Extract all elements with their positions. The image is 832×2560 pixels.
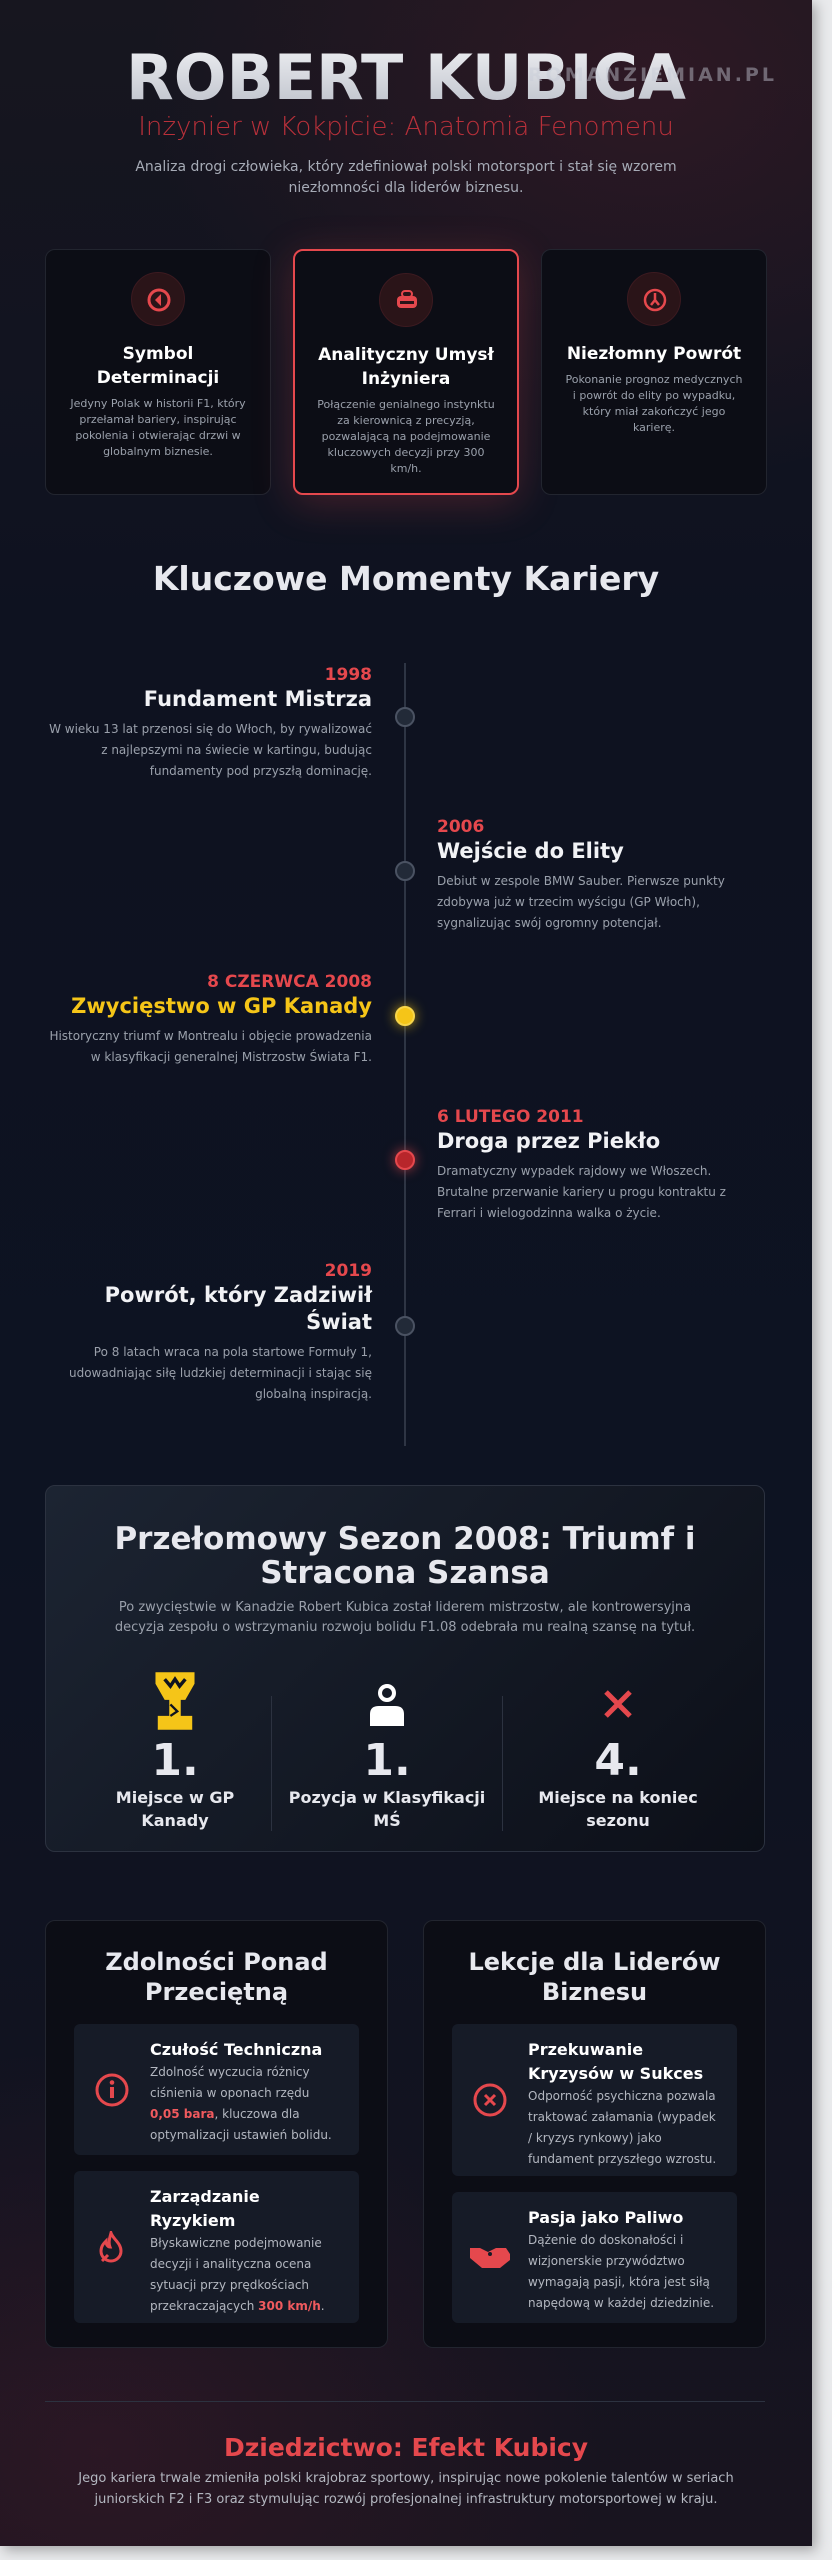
- entry 2008: 8 CZERWCA 2008: [207, 972, 372, 992]
- stat: klasyfikacja: Pozycja w Klasyfikacji MŚ: [289, 1788, 485, 1830]
- panel: lekcje: [423, 1920, 766, 2348]
- entry 2011: Droga przez Piekło: [437, 1129, 660, 1153]
- watermark: ROMANZIEMIAN.PL: [528, 64, 777, 86]
- stat: GP Kanady: [116, 1672, 234, 1830]
- legacy text: Jego kariera trwale zmieniła polski krajobraz sportowy, inspirując nowe pokolenie talentów w seriach juniorskich F2 i F3 oraz stymulując rozwój profesjonalnej infrastruktury motorsportowej w kraju.: [78, 2471, 734, 2507]
- panel: season 2008: [45, 1485, 765, 1852]
- entry 1998: [49, 665, 372, 778]
- entry 2006: Wejście do Elity: [437, 839, 624, 863]
- box: pasja: [452, 2192, 737, 2323]
- icon: x circle: [474, 2084, 506, 2116]
- panel text: Po zwycięstwie w Kanadzie Robert Kubica został liderem mistrzostw, ale kontrowersyjna decyzja zespołu o wstrzymaniu rozwoju bolidu F1.08 odebrała mu realną szansę na tytuł.: [115, 1600, 695, 1635]
- entry 2011: [437, 1107, 726, 1220]
- icon: gauge: [131, 272, 185, 326]
- intro text: Analiza drogi człowieka, który zdefiniował polski motorsport i stał się wzorem niezłomności dla liderów biznesu.: [135, 159, 677, 196]
- box: ryzyko: Zarządzanie Ryzykiem: [150, 2187, 260, 2230]
- entry 2006: 2006: [437, 817, 484, 837]
- stat: GP Kanady: 1.: [151, 1735, 199, 1786]
- panel: zdolności: [45, 1920, 388, 2348]
- heading: timeline: Kluczowe Momenty Kariery: [153, 559, 659, 598]
- box: czułość: Zdolność wyczucia różnicy ciśnienia w oponach rzędu 0,05 bara, kluczowa dla optymalizacji ustawień bolidu.: [150, 2065, 332, 2142]
- icon: trophy: [155, 1672, 194, 1730]
- entry 2019: 2019: [325, 1261, 372, 1281]
- entry 1998: 1998: [325, 665, 372, 685]
- icon: cross: [604, 1690, 632, 1718]
- icon: handshake: [470, 2248, 510, 2268]
- entry 1998: Fundament Mistrza: [144, 687, 372, 711]
- card: Analityczny Umysł: [293, 249, 519, 495]
- card: Symbol Determinacji: Symbol Determinacji: [97, 344, 219, 388]
- entry 2008: Zwycięstwo w GP Kanady: [71, 994, 372, 1018]
- card: Niezłomny Powrót: [541, 249, 767, 495]
- card: Niezłomny Powrót: Niezłomny Powrót: [567, 344, 741, 364]
- box: ryzyko: [74, 2171, 359, 2323]
- icon: clock: [627, 272, 681, 326]
- card: Analityczny Umysł: Połączenie genialnego instynktu za kierownicą z precyzją, pozwalającą na podejmowanie kluczowych decyzji przy 300 km/h.: [317, 398, 495, 475]
- heading: Lekcje dla Liderów Biznesu: [468, 1948, 721, 2006]
- entry 1998: W wieku 13 lat przenosi się do Włoch, by rywalizować z najlepszymi na świecie w kartingu, budując fundamenty pod przyszłą dominację.: [49, 722, 372, 778]
- stat: koniec sezonu: Miejsce na koniec sezonu: [538, 1788, 698, 1830]
- stat: koniec sezonu: [538, 1690, 698, 1830]
- box: czułość: [74, 2024, 359, 2155]
- box: ryzyko: Błyskawiczne podejmowanie decyzji i analityczna ocena sytuacji przy prędkościach przekraczających 300 km/h.: [150, 2236, 325, 2313]
- entry 2011: Dramatyczny wypadek rajdowy we Włoszech. Brutalne przerwanie kariery u progu kontraktu z Ferrari i wielogodzinna walka o życie.: [437, 1164, 726, 1220]
- box: czułość: Czułość Techniczna: [150, 2040, 322, 2059]
- card: Symbol Determinacji: [45, 249, 271, 495]
- stat: klasyfikacja: 1.: [363, 1735, 411, 1786]
- box: pasja: Pasja jako Paliwo: [528, 2208, 683, 2227]
- box: kryzysy: [452, 2024, 737, 2176]
- stat: koniec sezonu: 4.: [594, 1735, 642, 1786]
- card: Analityczny Umysł: Analityczny Umysł Inżyniera: [318, 345, 494, 389]
- entry 2019: Po 8 latach wraca na pola startowe Formuły 1, udowadniając siłę ludzkiej determinacji i stając się globalną inspiracją.: [69, 1345, 372, 1401]
- entry 2008: [49, 972, 372, 1064]
- entry 2006: Debiut w zespole BMW Sauber. Pierwsze punkty zdobywa już w trzecim wyścigu (GP Włoch), sygnalizując swój ogromny potencjał.: [437, 874, 725, 930]
- stat: GP Kanady: Miejsce w GP Kanady: [116, 1788, 234, 1830]
- icon: info: [96, 2074, 128, 2106]
- title: ROBERT KUBICA: [126, 41, 686, 114]
- legacy heading: Dziedzictwo: Efekt Kubicy: [224, 2433, 588, 2462]
- icon: person: [370, 1684, 404, 1726]
- box: kryzysy: Odporność psychiczna pozwala traktować załamania (wypadek / kryzys rynkowy) jako fundament przyszłego wzrostu.: [528, 2089, 716, 2166]
- title: [0, 38, 812, 118]
- heading: Zdolności Ponad Przeciętną: [105, 1948, 328, 2006]
- subtitle: Inżynier w Kokpicie: Anatomia Fenomenu: [138, 112, 674, 142]
- entry 2019: Powrót, który Zadziwił Świat: [105, 1283, 372, 1334]
- card: Symbol Determinacji: Jedyny Polak w historii F1, który przełamał bariery, inspirując pokolenia i otwierając drzwi w globalnym biznesie.: [70, 397, 246, 458]
- box: pasja: Dążenie do doskonałości i wizjonerskie przywództwo wymagają pasji, która jest siłą napędową w każdej dziedzinie.: [528, 2233, 714, 2310]
- entry 2011: 6 LUTEGO 2011: [437, 1107, 584, 1127]
- icon: helmet: [379, 273, 433, 327]
- card: Niezłomny Powrót: Pokonanie prognoz medycznych i powrót do elity po wypadku, który miał zakończyć jego karierę.: [566, 373, 742, 434]
- entry 2019: [69, 1261, 372, 1401]
- timeline: [404, 663, 406, 1446]
- panel heading: Przełomowy Sezon 2008: Triumf i Stracona Szansa: [114, 1521, 696, 1591]
- stat: klasyfikacja: [289, 1684, 485, 1830]
- entry 2008: Historyczny triumf w Montrealu i objęcie prowadzenia w klasyfikacji generalnej Mistrzostw Świata F1.: [49, 1029, 372, 1064]
- box: kryzysy: Przekuwanie Kryzysów w Sukces: [528, 2040, 703, 2083]
- icon: fire: [100, 2231, 122, 2262]
- entry 2006: [437, 817, 725, 930]
